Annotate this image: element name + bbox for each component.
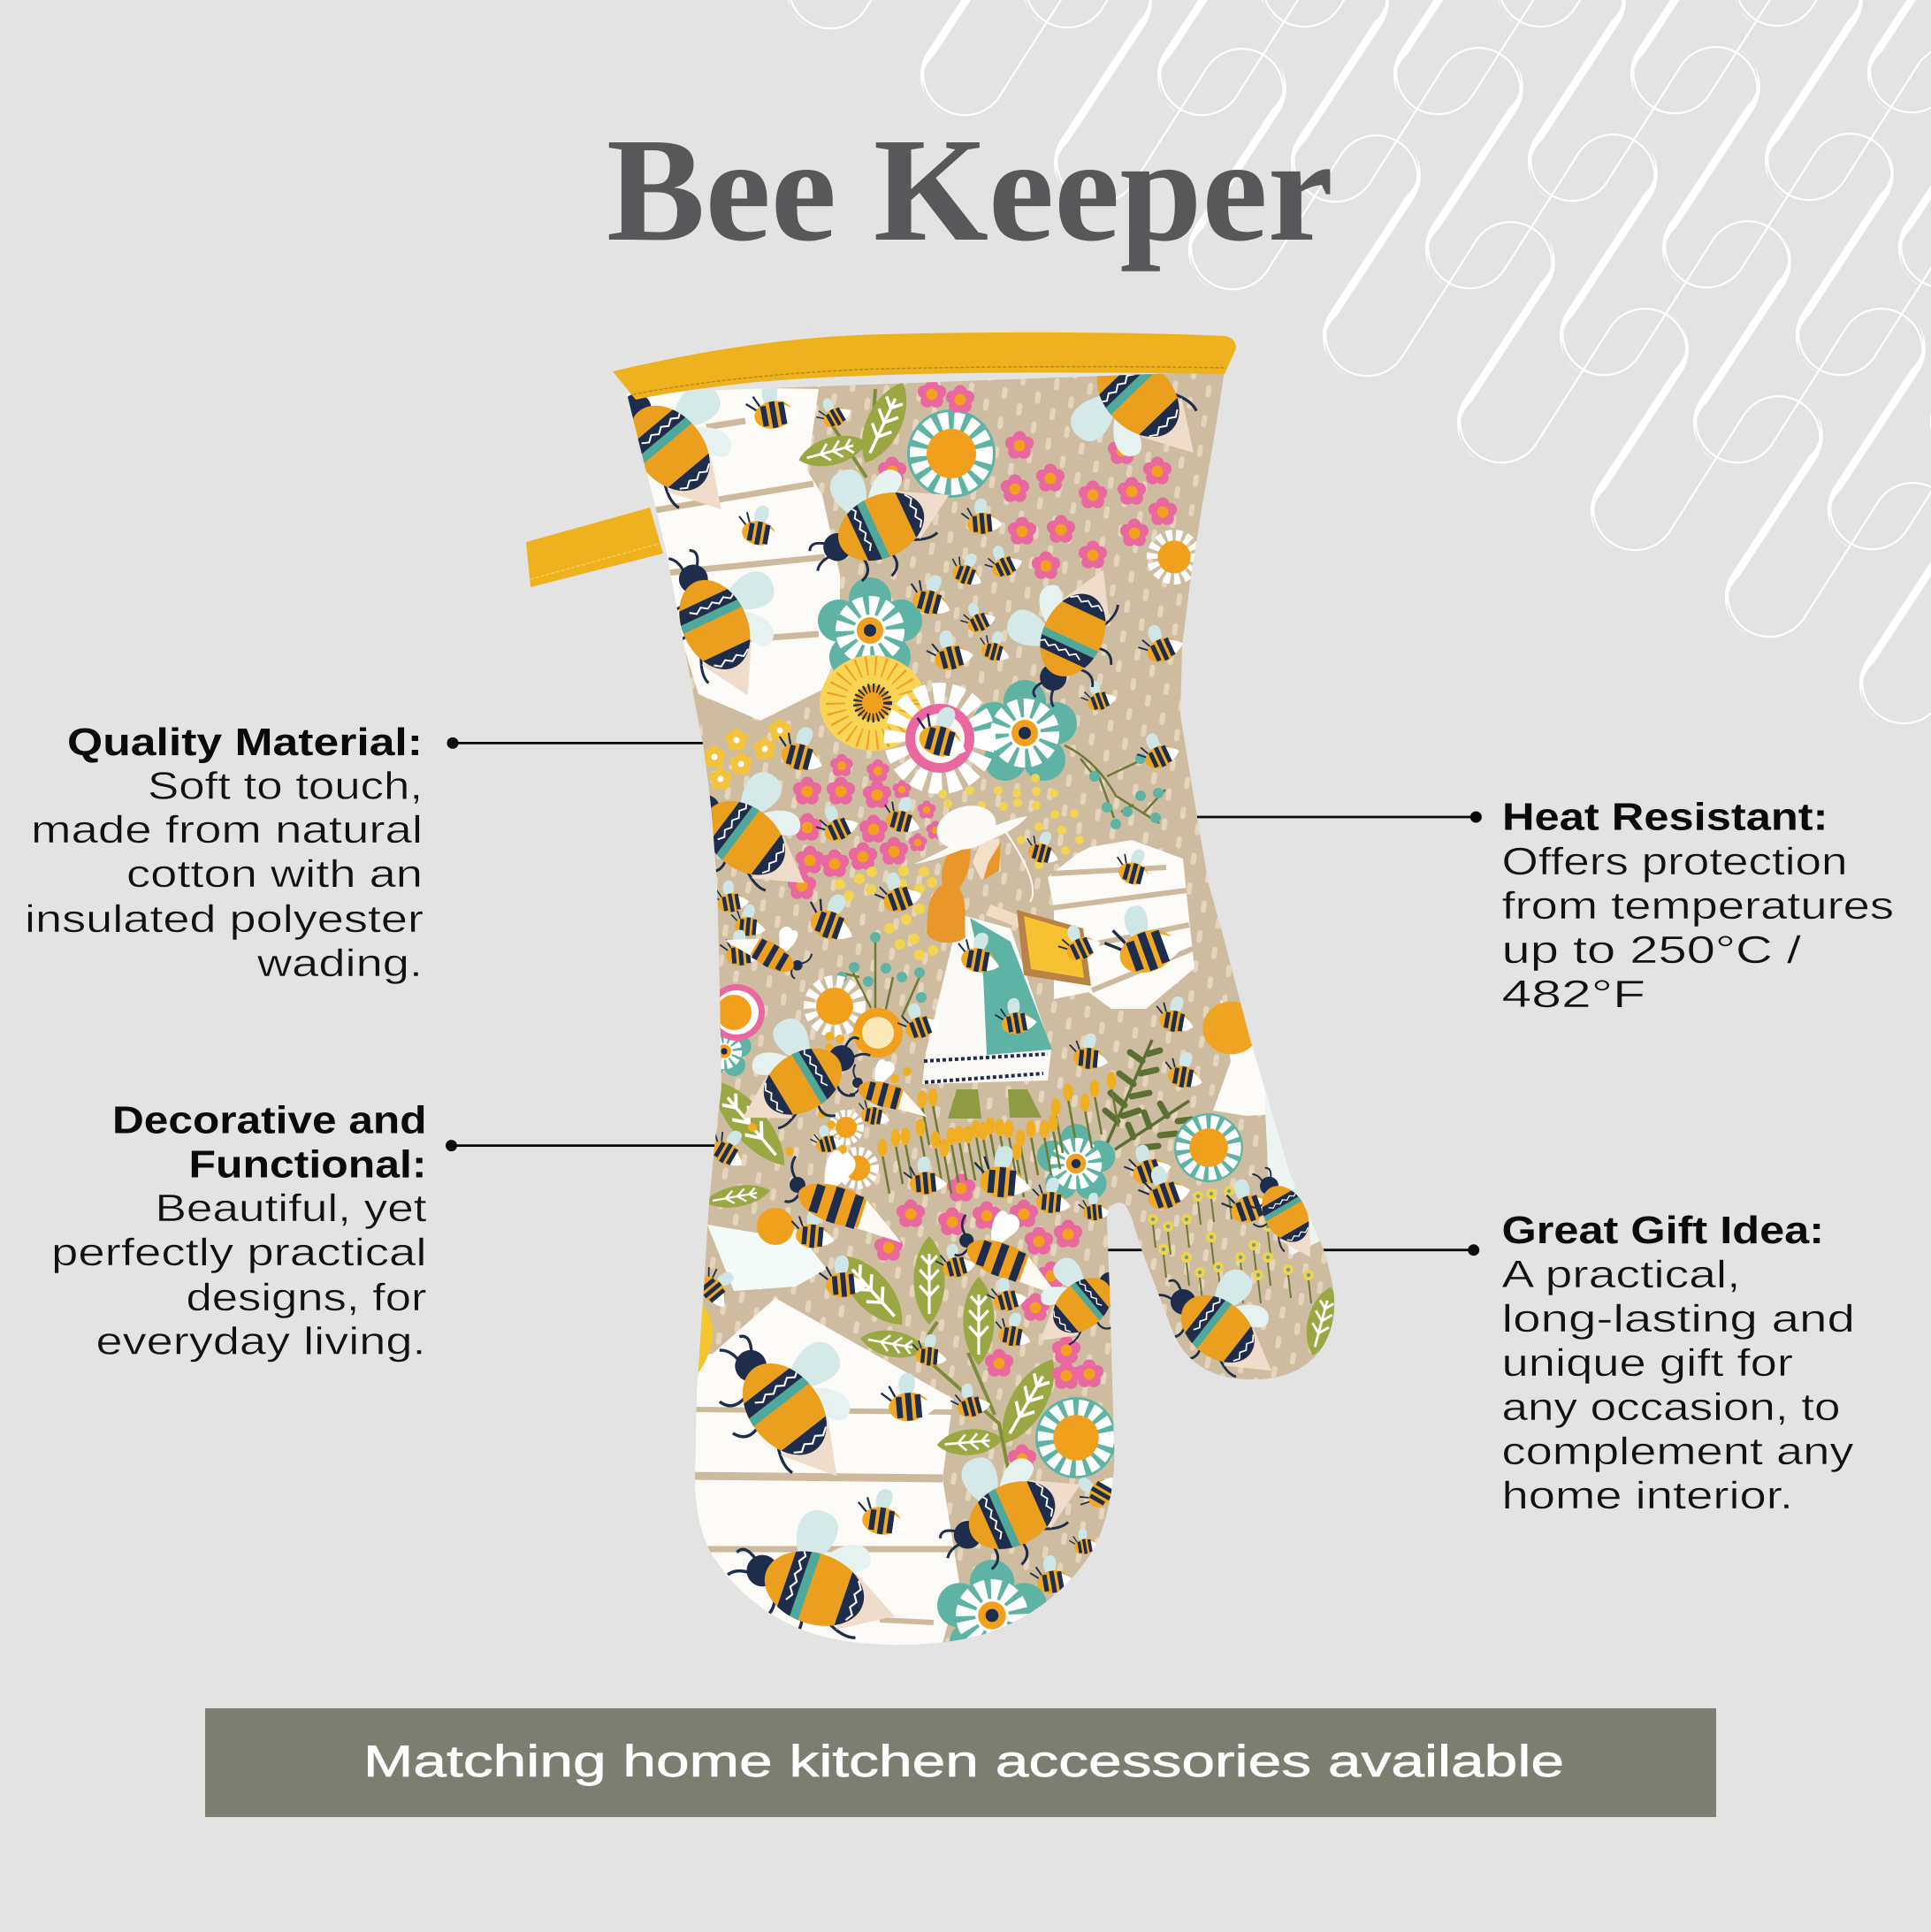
callout: heat resistant (1470, 796, 1894, 1016)
body text: Beautiful, yet (156, 1187, 426, 1230)
cattails (877, 1072, 1314, 1303)
large bees (577, 301, 1349, 1669)
connector lines (451, 743, 1476, 1250)
banner (205, 1708, 1716, 1817)
body text: unique gift for (1501, 1341, 1793, 1385)
body text: wading. (256, 942, 423, 985)
banner text: Matching home kitchen accessories available (363, 1737, 1564, 1786)
callout: quality material (25, 721, 458, 985)
heading (112, 1098, 426, 1187)
body text: complement any (1501, 1430, 1853, 1473)
body text: Offers protection (1501, 840, 1848, 883)
heading: Great Gift Idea: (1501, 1209, 1824, 1252)
hanging loop (526, 508, 663, 587)
body text: 482°F (1501, 973, 1645, 1016)
body text: insulated polyester (25, 897, 424, 941)
body text: cotton with an (126, 852, 423, 896)
glove printed fabric (627, 373, 1335, 1645)
callout dot (1470, 812, 1482, 822)
heading: Heat Resistant: (1502, 796, 1828, 839)
callout: decorative and functional (51, 1098, 457, 1363)
body text (51, 1187, 426, 1363)
body text: made from natural (31, 808, 423, 851)
heading: Functional: (189, 1142, 426, 1187)
leaves and sprigs (700, 375, 1344, 1468)
heading: Decorative and (112, 1098, 426, 1142)
body text: Soft to touch, (148, 764, 423, 808)
body text: everyday living. (95, 1320, 426, 1363)
body text: from temperatures (1501, 884, 1894, 928)
callout dot (1468, 1244, 1479, 1256)
body text: A practical, (1501, 1253, 1740, 1296)
small bees (691, 378, 1277, 1597)
yellow dots (835, 774, 1084, 960)
callout dot (446, 1140, 457, 1151)
beekeeper woman (914, 799, 1091, 1119)
body text: home interior. (1501, 1474, 1793, 1517)
title: Bee Keeper (607, 108, 1333, 272)
callout: great gift idea (1468, 1209, 1855, 1517)
body text: designs, for (186, 1276, 426, 1319)
body text: up to 250°C / (1501, 928, 1802, 972)
banner background (205, 1708, 1716, 1817)
decorative background pattern (786, 0, 1931, 723)
body text: perfectly practical (51, 1231, 426, 1274)
body text: any occasion, to (1501, 1386, 1841, 1429)
flowers (694, 380, 1260, 1666)
body text (1501, 1253, 1855, 1517)
heading: Quality Material: (67, 721, 423, 764)
body text (1501, 840, 1894, 1016)
body text (25, 764, 424, 985)
yellow cuff (613, 332, 1236, 400)
body text: long-lasting and (1501, 1297, 1855, 1340)
icon: oven glove (526, 301, 1349, 1669)
callout dot (447, 737, 458, 749)
beehive white areas (610, 386, 1326, 1662)
